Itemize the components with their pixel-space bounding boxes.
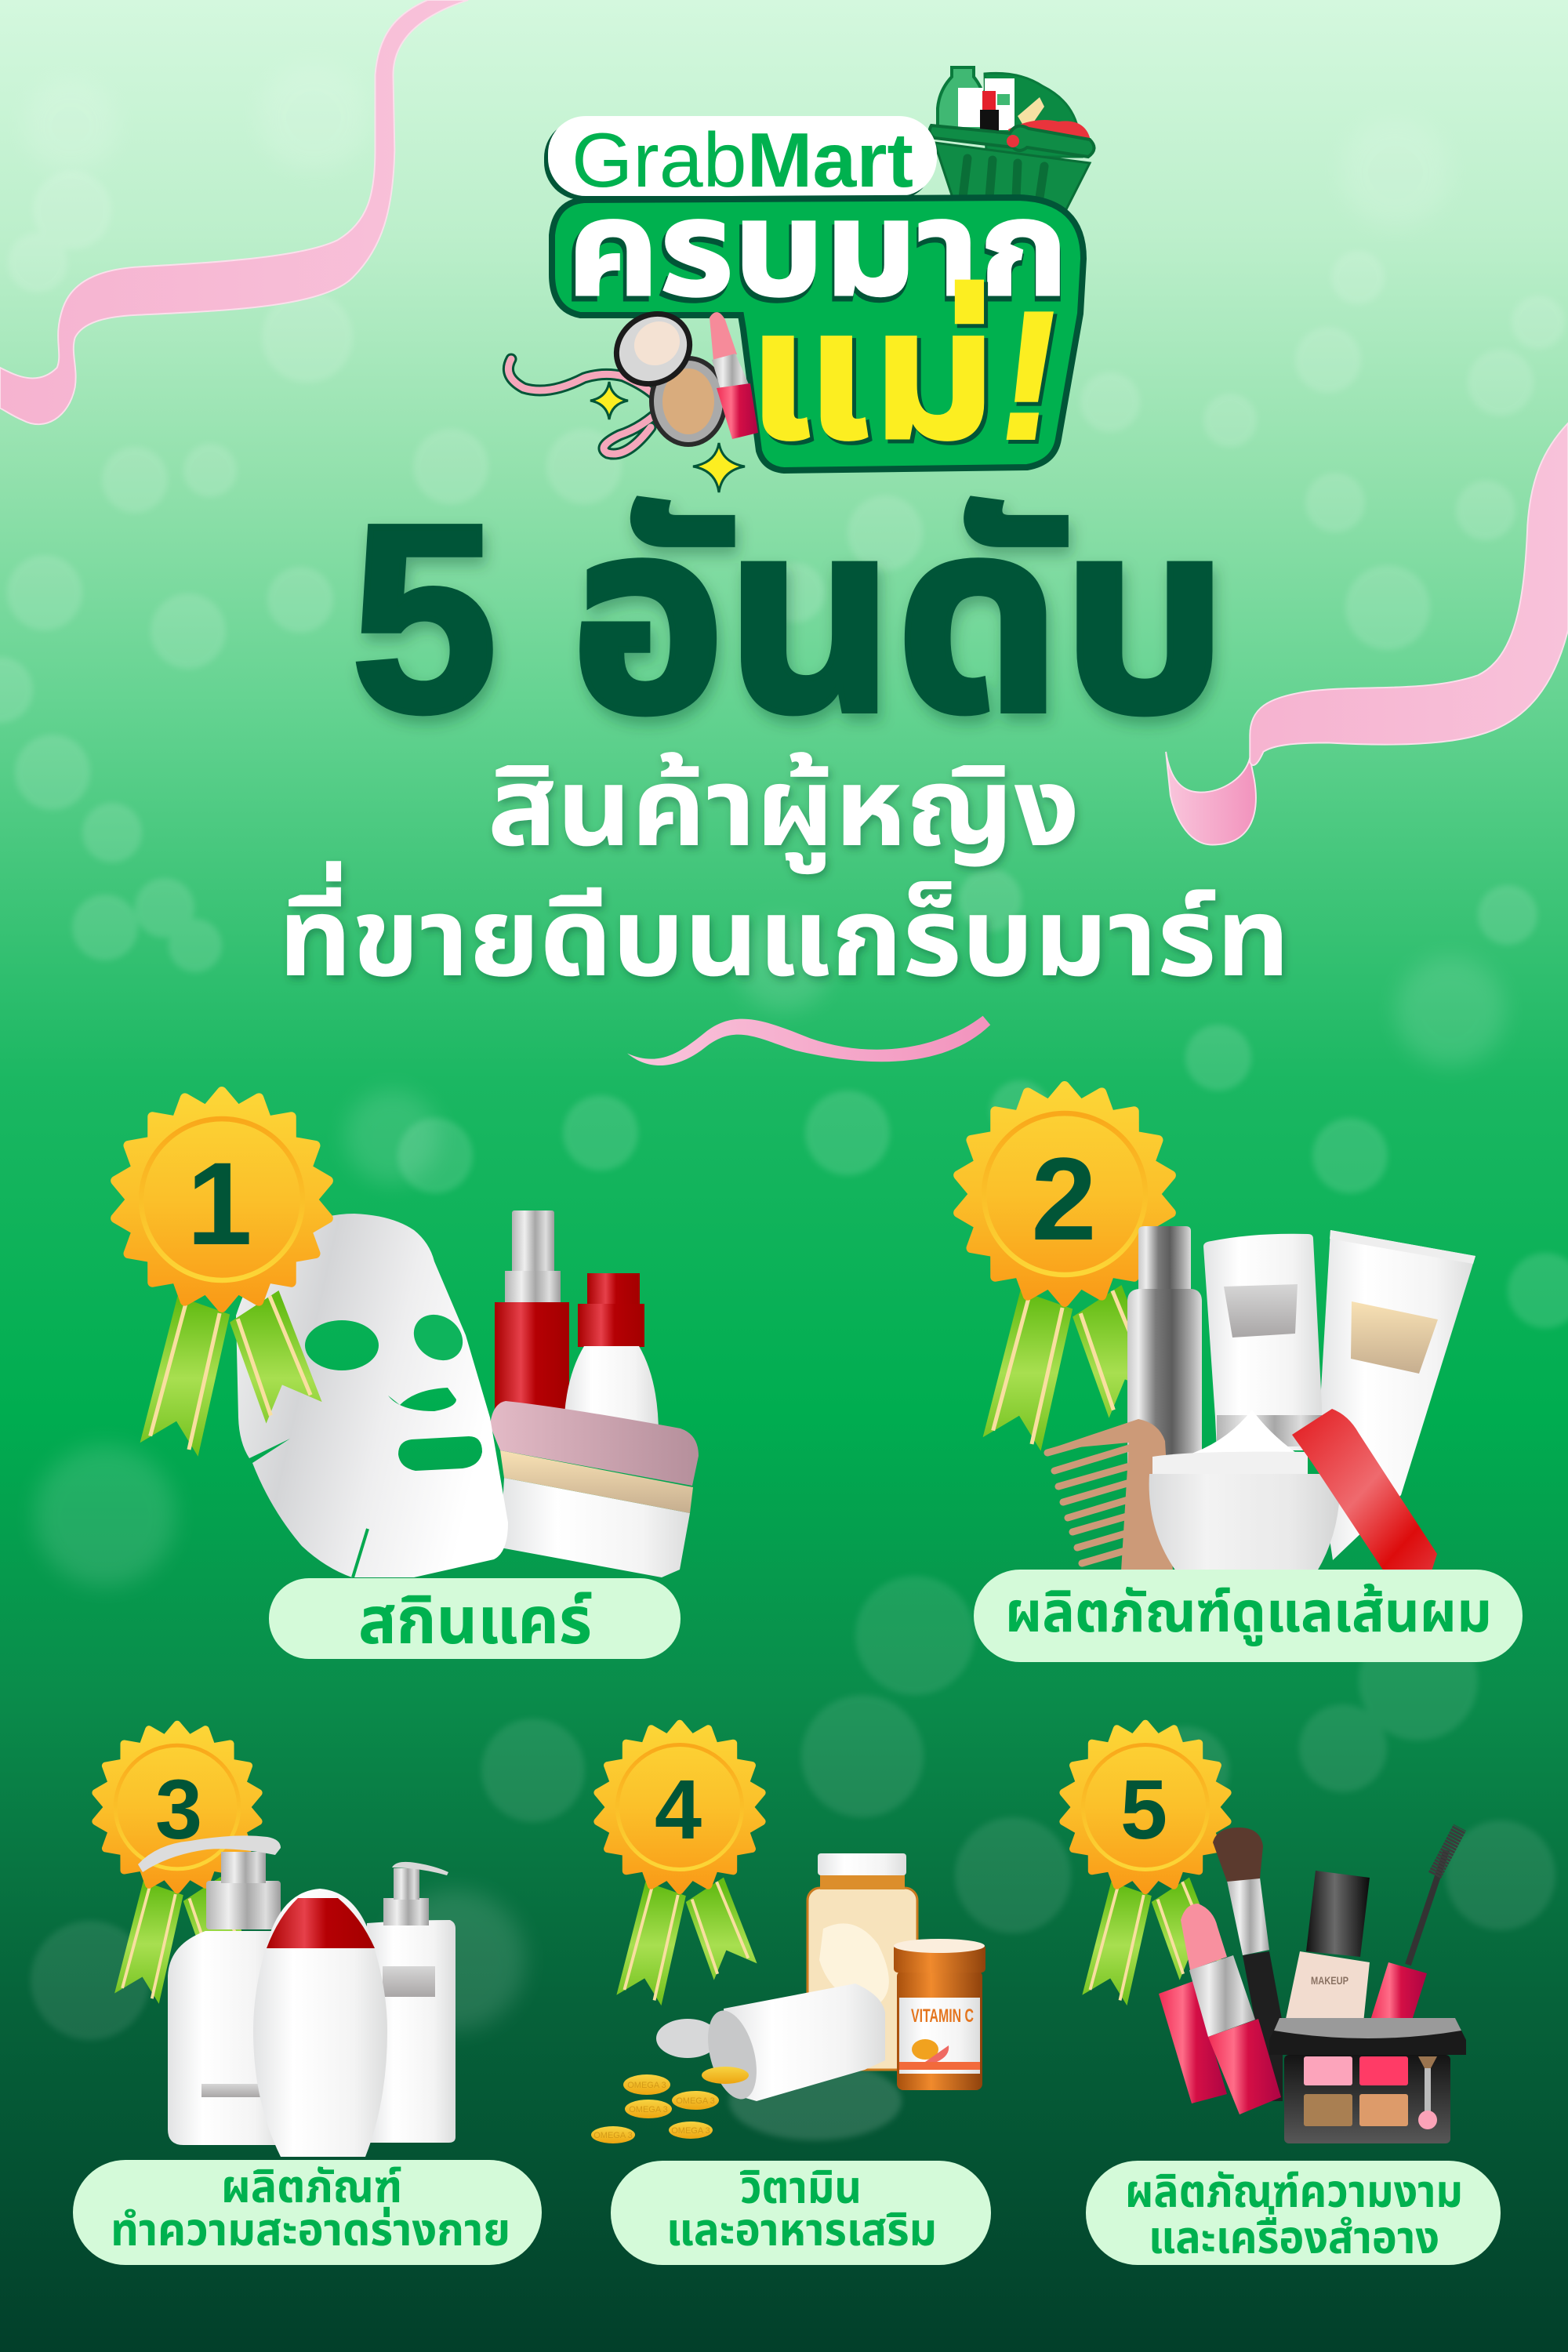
pink mini ribbon	[508, 359, 662, 454]
label pill	[611, 2161, 991, 2265]
open white bottle	[656, 1984, 885, 2104]
medal 5	[1049, 1711, 1242, 2005]
label pill: และเครื่องสำอาง	[1149, 2205, 1439, 2263]
wordmark: GrabMart: GrabMart	[572, 117, 913, 203]
eyeshadow palette	[1269, 2018, 1466, 2143]
cream bowl	[1149, 1410, 1340, 1571]
label pill: ผลิตภัณฑ์ดูแลเส้นผม	[1005, 1581, 1492, 1646]
supplement jar	[808, 1853, 917, 2070]
illustration: skincare products	[236, 1210, 699, 1577]
right pump bottle	[367, 1862, 456, 2143]
medal 3	[82, 1712, 273, 2004]
pink ribbon: right	[1166, 423, 1568, 845]
slogan word: แม่!: !	[985, 274, 1075, 477]
omega 3 capsules: OMEGA 3	[627, 2081, 666, 2090]
omega 3 capsules	[591, 2074, 719, 2143]
foundation bottle	[1285, 1871, 1370, 2023]
rank number: 2	[1031, 1133, 1097, 1265]
medal 1	[97, 1076, 347, 1457]
omega 3 capsules: OMEGA 3	[676, 2096, 715, 2106]
mascara	[1370, 1828, 1460, 2023]
label pill: สกินแคร์	[358, 1584, 592, 1657]
pump bottle	[564, 1273, 659, 1435]
label pill: ผลิตภัณฑ์ความงาม	[1125, 2166, 1463, 2217]
slogan word: แม่!: !	[988, 278, 1077, 481]
middle tube	[1203, 1234, 1322, 1450]
icon: grocery basket	[930, 67, 1094, 209]
icon: powder compact	[599, 296, 728, 447]
subheading: สินค้าผู้หญิง	[488, 746, 1080, 874]
label pill	[269, 1578, 681, 1659]
subheading	[278, 746, 1290, 999]
slogan word: แม่!: แม่	[747, 271, 996, 478]
comb	[1045, 1419, 1173, 1571]
omega 3 capsules: OMEGA 3	[671, 2126, 710, 2136]
rank 1: skincare	[97, 1076, 699, 1659]
logo: GrabMart ครบมาก แม่!	[508, 67, 1094, 492]
reflection	[729, 2062, 902, 2140]
medal 4	[583, 1711, 776, 2005]
red lid	[1292, 1409, 1437, 1571]
vitamin C bottle	[894, 1939, 985, 2090]
omega 3 capsules: OMEGA 3	[593, 2131, 633, 2140]
product name: MAKEUP	[1311, 1974, 1348, 1987]
label pill	[73, 2160, 542, 2265]
rank number: 3	[155, 1762, 202, 1857]
rank 5: beauty and cosmetics	[1049, 1711, 1501, 2265]
omega 3 capsules: OMEGA 3	[629, 2105, 668, 2114]
logo pill: GrabMart	[544, 116, 937, 203]
medal 2	[940, 1070, 1189, 1451]
illustration: hair care products	[1045, 1226, 1475, 1571]
rank 2: hair care	[940, 1070, 1523, 1662]
label pill	[974, 1570, 1523, 1662]
illustration: cleansing bottles	[138, 1835, 456, 2157]
subheading: ที่ขายดีบนแกร็บมาร์ท	[278, 860, 1290, 999]
spray bottle	[495, 1210, 569, 1412]
slogan word: แม่!: แม่	[750, 274, 1000, 481]
label pill: วิตามิน	[739, 2162, 862, 2213]
left pump bottle	[138, 1835, 284, 2145]
icon: sparkle large	[693, 443, 745, 492]
right tube	[1317, 1230, 1475, 1560]
label pill: และอาหารเสริม	[666, 2205, 937, 2256]
label pill: ทำความสะอาดร่างกาย	[111, 2205, 510, 2256]
illustration: cosmetics	[1159, 1828, 1466, 2143]
label pill: ผลิตภัณฑ์	[221, 2161, 402, 2212]
spray bottle	[1127, 1226, 1202, 1544]
label pill	[1086, 2161, 1501, 2265]
rank number: 5	[1120, 1762, 1167, 1857]
slogan word: ครบมาก: ครบมาก	[567, 175, 1069, 324]
lipstick	[1159, 1904, 1281, 2114]
sheet mask	[236, 1214, 508, 1577]
slogan word: ครบมาก: ครบมาก	[564, 180, 1069, 328]
rank 3: body cleansing	[73, 1712, 542, 2265]
centre bottle	[253, 1889, 387, 2157]
heading: 5 อันดับ: 5 อันดับ	[351, 470, 1228, 768]
cream jar	[490, 1401, 699, 1577]
rank 4: vitamins	[583, 1711, 991, 2265]
icon: lipstick	[710, 312, 758, 439]
rank number: 1	[187, 1138, 252, 1269]
slogan backing shape	[552, 198, 1083, 470]
icon: sparkle small	[590, 382, 628, 419]
illustration: vitamin bottles	[591, 1853, 985, 2143]
pink ribbon: top left	[0, 0, 468, 424]
makeup brush	[1213, 1828, 1283, 2101]
rank number: 4	[655, 1762, 702, 1857]
label text: VITAMIN C	[911, 2005, 974, 2027]
decorative squiggle ribbon	[627, 1016, 990, 1065]
